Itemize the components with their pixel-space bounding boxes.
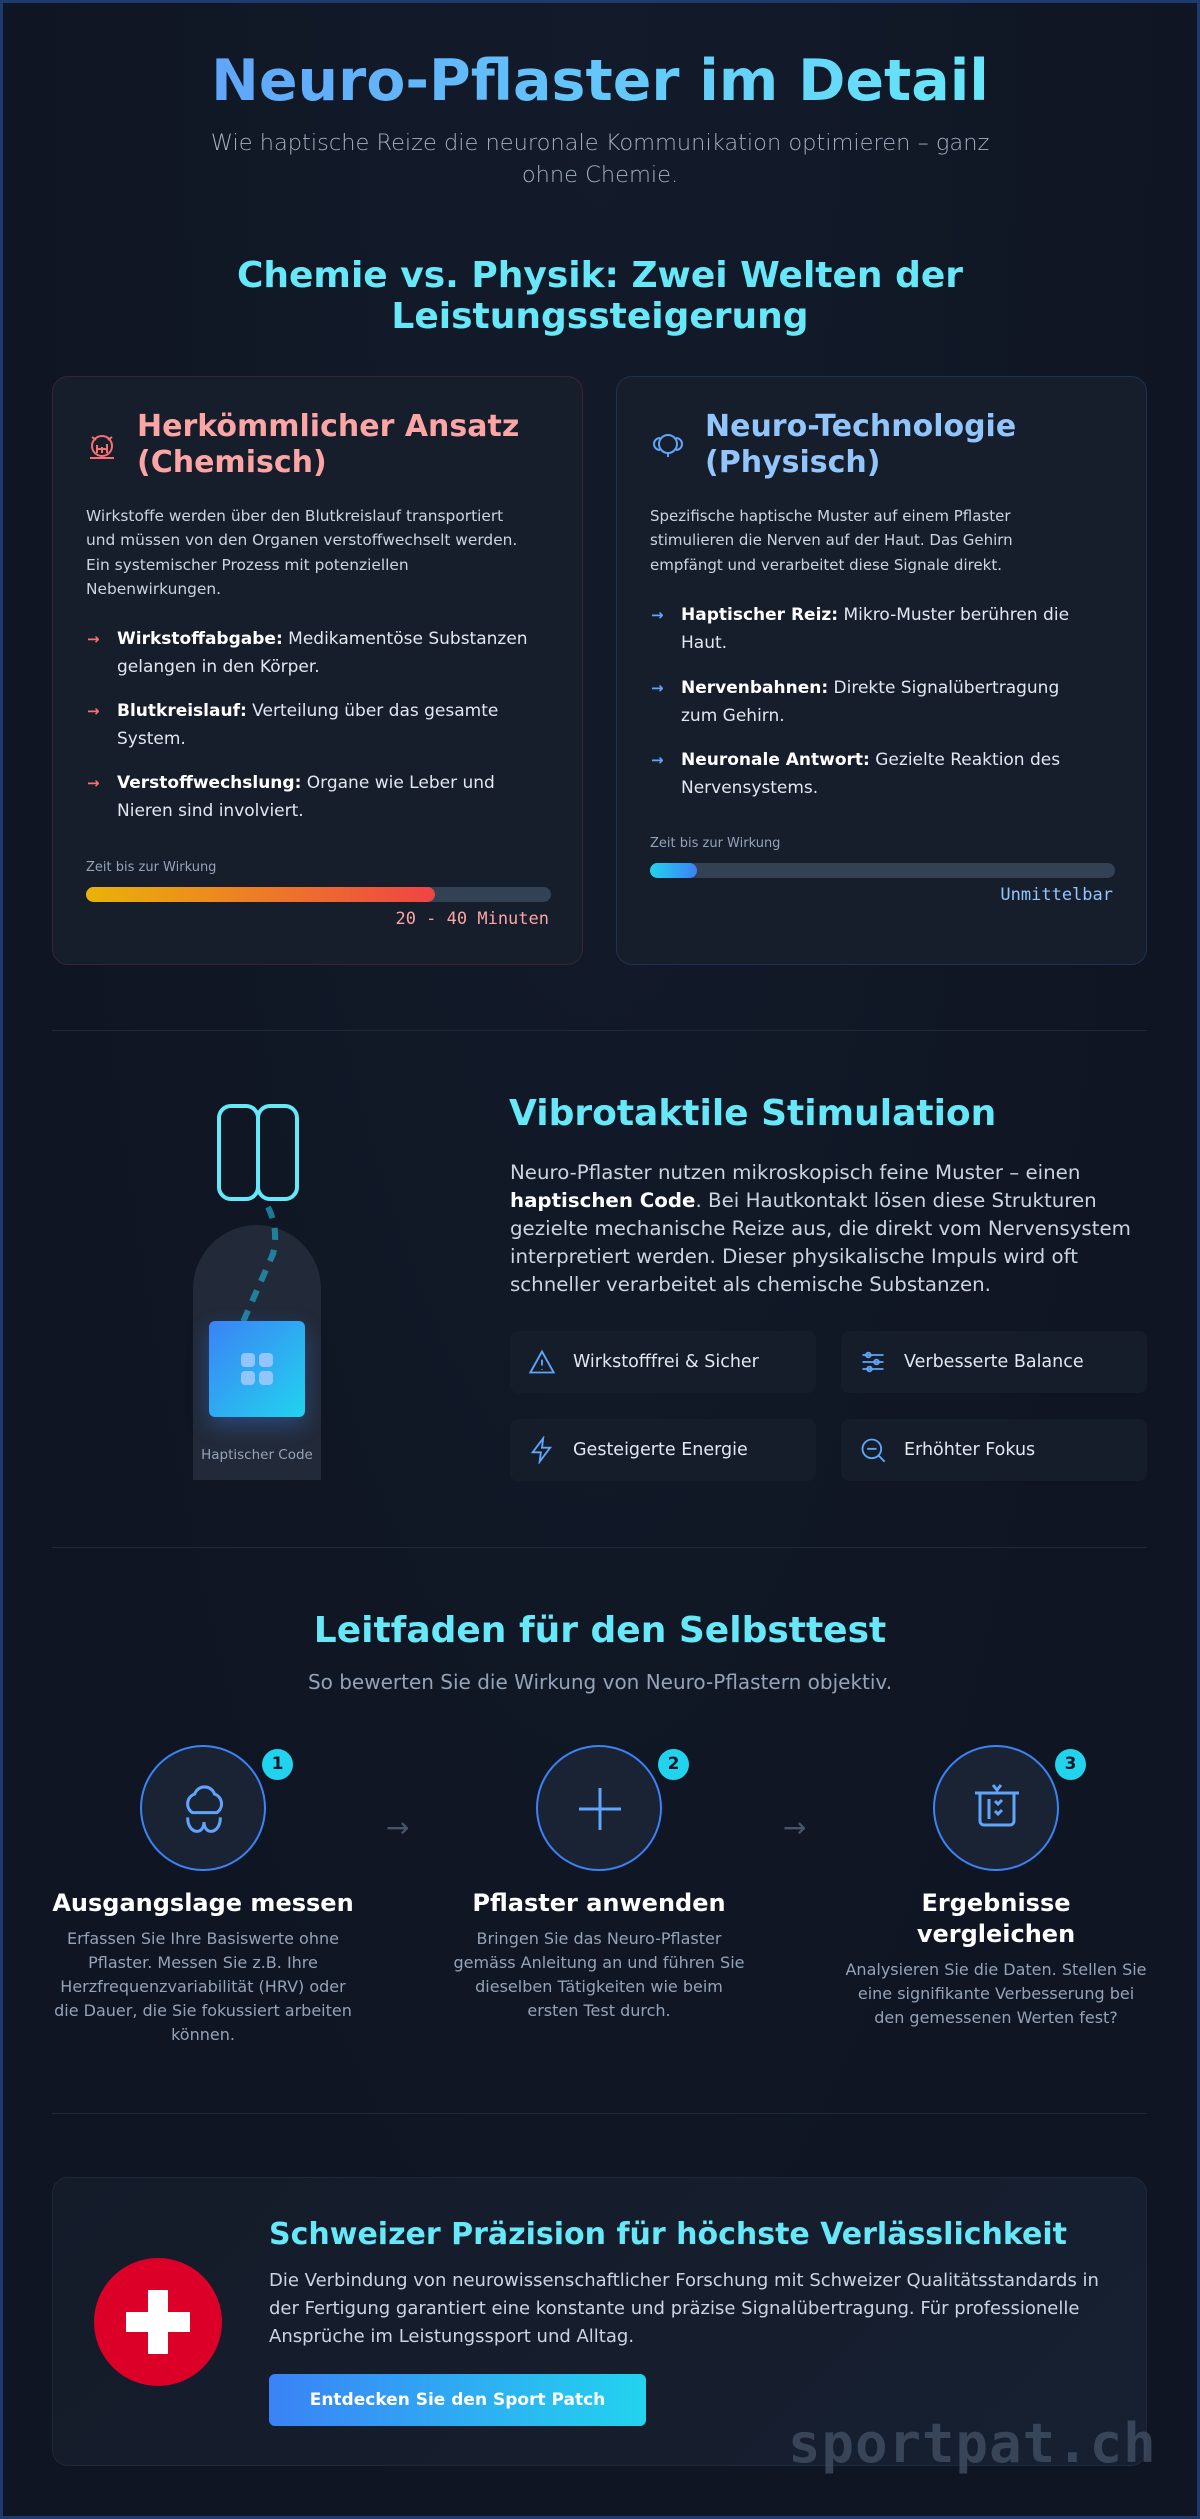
bar: time — [86, 887, 551, 902]
bar: time — [650, 863, 1115, 878]
badge: 1 — [272, 1754, 283, 1774]
paragraph: Die Verbindung von neurowissenschaftlicher Forschung mit Schweizer Qualitätsstandards in der Fertigung garantiert eine konstante und präzise Signalübertragung. Für professionelle Ansprüche im Leistungssport und Alltag. — [269, 2270, 1099, 2347]
step 2: Bringen Sie das Neuro-Pflaster gemäss Anleitung an und führen Sie dieselben Tätigkeiten wie beim ersten Test durch. — [454, 1929, 744, 2020]
list item: Wirkstoffabgabe: Medikamentöse Substanzen gelangen in den Körper. — [117, 629, 528, 677]
panel: Swiss precision — [52, 2177, 1147, 2466]
panel: neuro technology: → — [651, 679, 664, 697]
list item: Neuronale Antwort: Gezielte Reaktion des Nervensystems. — [681, 750, 1060, 798]
card heading: Herkömmlicher Ansatz (Chemisch) — [137, 409, 519, 480]
heading: Chemie vs. Physik: Chemie vs. Physik: Zwei Welten der Leistungssteigerung — [237, 255, 963, 337]
watermark: sportpat.ch — [788, 2412, 1157, 2475]
list item: Haptischer Reiz: Mikro-Muster berühren die Haut. — [681, 605, 1069, 653]
subheading: So bewerten Sie die Wirkung von Neuro-Pflastern objektiv. — [308, 1670, 892, 1694]
list item: Nervenbahnen: Direkte Signalübertragung zum Gehirn. — [681, 678, 1059, 726]
arrow: → — [386, 1811, 409, 1844]
list item: Verstoffwechslung: Organe wie Leber und Nieren sind involviert. — [117, 773, 495, 821]
panel: neuro technology — [616, 376, 1147, 965]
label: Zeit bis zur Wirkung — [650, 836, 780, 851]
haptic code square — [209, 1321, 305, 1417]
panel: chemical approach — [52, 376, 583, 965]
feature: balance — [841, 1331, 1147, 1393]
description — [86, 507, 517, 598]
badge: 3 — [1065, 1754, 1076, 1774]
panel: neuro technology: → — [651, 751, 664, 769]
feature: safe — [510, 1331, 816, 1393]
list item: Blutkreislauf: Verteilung über das gesamte System. — [117, 701, 498, 749]
heading: Vibrotaktile: Vibrotaktile Stimulation — [509, 1093, 996, 1134]
button: Entdecken Sie den Sport Patch — [310, 2390, 605, 2410]
step 1: Erfassen Sie Ihre Basiswerte ohne Pflaster. Messen Sie z.B. Ihre Herzfrequenzvariabilität (HRV) oder die Dauer, die Sie fokussiert arbeiten können. — [54, 1929, 352, 2044]
step 3: den gemessenen Werten fest? — [874, 2008, 1118, 2027]
feature: energy — [510, 1419, 816, 1481]
description: Wirkstoffe werden über den Blutkreislauf transportiert — [86, 507, 503, 525]
description: und müssen von den Organen verstoffwechselt werden. — [86, 531, 517, 549]
badge — [262, 1749, 293, 1780]
step 3 — [845, 1745, 1147, 2027]
icon: brain — [653, 434, 683, 457]
step 3: eine signifikante Verbesserung bei — [858, 1984, 1134, 2003]
label: Zeit bis zur Wirkung — [86, 860, 216, 875]
icon: swiss flag — [94, 2258, 222, 2386]
panel: chemical approach: → — [87, 702, 100, 720]
icon: fingers — [217, 1104, 299, 1321]
button — [269, 2374, 646, 2426]
paragraph: Neuro-Pflaster nutzen mikroskopisch feine Muster – einen haptischen Code. Bei Hautkontakt lösen diese Strukturen gezielte mechanische Reize aus, die direkt vom Nervensystem interpretiert werden. Dieser physikalische Impuls wird oft schneller verarbeitet als chemische Substanzen. — [510, 1161, 1131, 1296]
description: Spezifische haptische Muster auf einem Pflaster stimulieren die Nerven auf der Haut. Das Gehirn empfängt und verarbeitet diese Signale direkt. — [650, 507, 1013, 574]
step 2: Pflaster anwenden — [472, 1889, 726, 1917]
feature: balance: Verbesserte Balance — [904, 1352, 1084, 1372]
card heading: Neuro-Technologie (Physisch) — [705, 409, 1016, 480]
subtitle: Wie haptische Reize die neuronale Kommunikation optimieren – ganz ohne Chemie. — [211, 130, 989, 188]
icon: chemical — [90, 435, 114, 459]
value: Unmittelbar — [1000, 885, 1113, 905]
skin dome — [193, 1225, 321, 1480]
badge — [1055, 1749, 1086, 1780]
heading: Leitfaden: Leitfaden für den Selbsttest — [314, 1610, 886, 1651]
title: Neuro-Pflaster im Detail — [211, 48, 989, 114]
illustration: haptic patch — [193, 1104, 321, 1480]
badge — [658, 1749, 689, 1780]
step 1 — [52, 1745, 354, 2044]
caption: Haptischer Code — [201, 1447, 313, 1463]
arrow: → — [783, 1811, 806, 1844]
step 3: Analysieren Sie die Daten. Stellen Sie — [845, 1960, 1147, 1979]
step 1: Ausgangslage messen — [52, 1889, 354, 1917]
icon: plus — [536, 1745, 662, 1871]
icon: compare — [933, 1745, 1059, 1871]
panel: chemical approach: → — [87, 774, 100, 792]
feature: safe: Wirkstofffrei & Sicher — [573, 1352, 759, 1372]
heading: Schweizer Präzision für höchste Verlässlichkeit — [269, 2217, 1067, 2252]
badge: 2 — [668, 1754, 679, 1774]
step 2 — [454, 1745, 744, 2020]
value: 20 - 40 Minuten — [395, 909, 549, 929]
feature: focus: Erhöhter Fokus — [904, 1440, 1035, 1460]
icon: measure — [140, 1745, 266, 1871]
feature: energy: Gesteigerte Energie — [573, 1440, 748, 1460]
description: Ein systemischer Prozess mit potenziellen Nebenwirkungen. — [86, 556, 409, 598]
panel: chemical approach: → — [87, 630, 100, 648]
step 3: Ergebnisse vergleichen — [917, 1889, 1075, 1948]
feature: focus — [841, 1419, 1147, 1481]
panel: neuro technology: → — [651, 606, 664, 624]
